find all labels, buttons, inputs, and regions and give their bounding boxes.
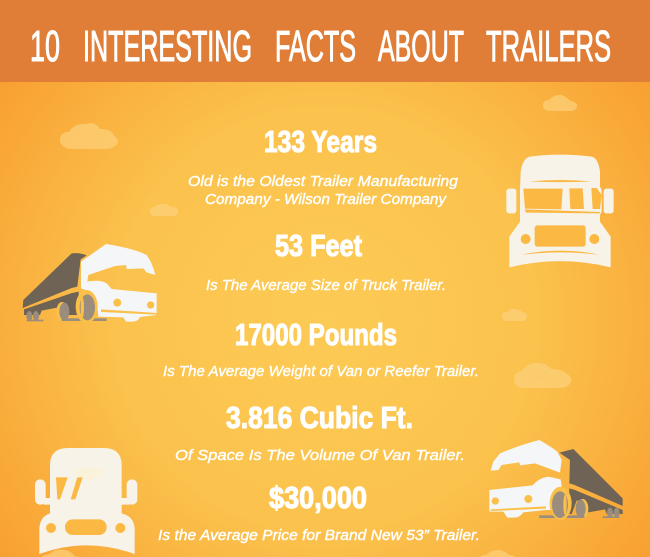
fact 4 heading: 3.816 Cubic Ft.	[226, 400, 413, 435]
fact 2 heading: 53 Feet	[275, 228, 362, 263]
title: ABOUT	[378, 22, 464, 71]
icon: front truck right	[506, 155, 614, 267]
fact 4 text: Of Space Is The Volume Of Van Trailer.	[175, 447, 465, 464]
icon: side truck lower right	[489, 440, 623, 520]
icon: front truck lower left	[35, 448, 137, 554]
fact 1 text	[188, 173, 459, 208]
title: FACTS	[275, 22, 356, 71]
fact 3	[163, 317, 479, 380]
title	[30, 22, 611, 71]
title: 10	[30, 22, 60, 71]
fact 1 heading: 133 Years	[264, 124, 377, 159]
clouds	[40, 95, 577, 557]
fact 2 text: Is The Average Size of Truck Trailer.	[206, 277, 446, 294]
fact 1 text: Old is the Oldest Trailer Manufacturing	[188, 173, 459, 190]
title: INTERESTING	[83, 22, 252, 71]
fact 2	[206, 228, 446, 294]
fact 5 heading: $30,000	[269, 480, 367, 515]
fact 4	[175, 400, 465, 464]
fact 1	[188, 124, 459, 208]
fact 3 text: Is The Average Weight of Van or Reefer Trailer.	[163, 363, 479, 380]
title banner	[0, 0, 650, 82]
fact 5 text: Is the Average Price for Brand New 53” Trailer.	[158, 527, 480, 544]
fact 5	[158, 480, 480, 544]
fact 3 heading: 17000 Pounds	[235, 317, 397, 352]
fact 1 text: Company - Wilson Trailer Company	[205, 191, 448, 208]
icon: side truck left	[23, 244, 157, 323]
